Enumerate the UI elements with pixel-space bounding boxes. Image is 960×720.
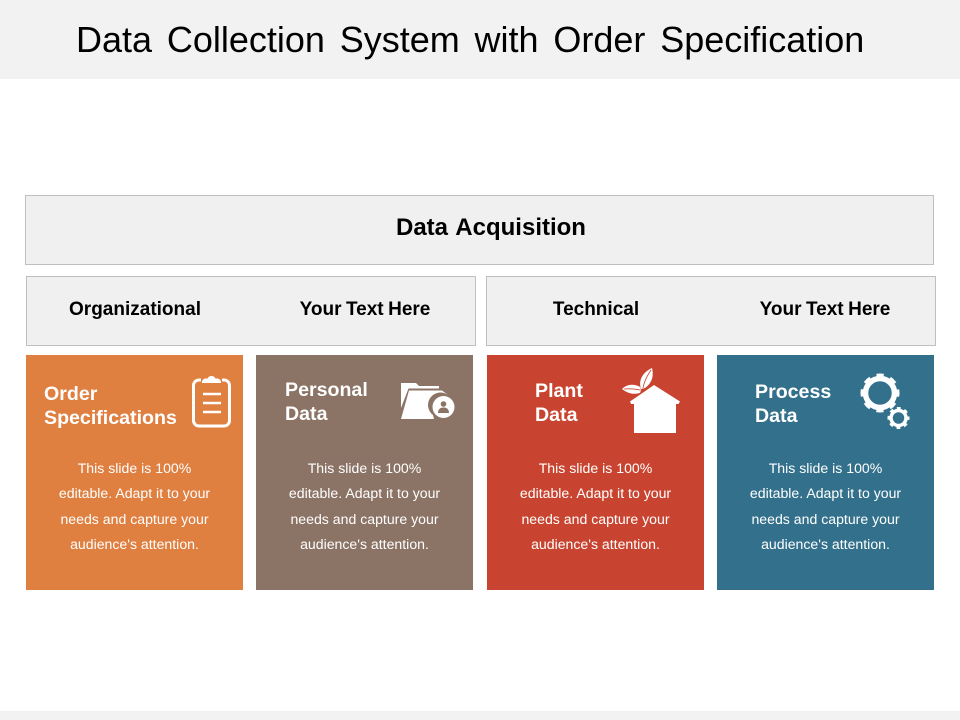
body text: process data [750,460,901,552]
heading: personal data: Personal [285,379,368,401]
heading: process data: Process [755,381,831,403]
body text: order specifications: needs and capture your [60,511,209,527]
title: Data Collection System with Order Specification [76,19,864,60]
footer strip [0,711,960,720]
heading: order specifications [44,383,177,429]
body text: process data: audience's attention. [761,536,890,552]
heading: plant data [535,380,583,426]
body text: order specifications [59,460,210,552]
label: organizational: Organizational [69,299,201,320]
heading: plant data: Plant [535,380,583,402]
body text: plant data [520,460,671,552]
heading: process data [755,381,831,427]
heading: plant data: Data [535,404,577,426]
icon: folder with person [401,383,454,419]
body text: personal data: This slide is 100% [308,460,421,476]
body text: order specifications: This slide is 100% [78,460,191,476]
body text: process data: editable. Adapt it to your [750,485,901,501]
panel: order specifications [26,355,243,590]
heading: personal data [285,379,368,425]
body text: process data: This slide is 100% [769,460,882,476]
icon: house with leaves [622,368,680,433]
label: your text here left: Your Text Here [300,299,430,320]
panel: process data [717,355,934,590]
body text: personal data: needs and capture your [290,511,439,527]
panel: organizational [26,276,476,346]
title bar [0,0,960,79]
body text: process data: needs and capture your [751,511,900,527]
heading: personal data: Data [285,403,327,425]
body text: order specifications: audience's attention. [70,536,199,552]
body text: plant data: This slide is 100% [539,460,652,476]
body text: plant data: audience's attention. [531,536,660,552]
heading: process data: Data [755,405,797,427]
body text: plant data: needs and capture your [521,511,670,527]
heading: order specifications: Order [44,383,97,405]
panel: technical [486,276,936,346]
heading: order specifications: Specifications [44,407,177,429]
icon: gears [860,374,910,429]
panel: plant data [487,355,704,590]
label: your text here right: Your Text Here [760,299,890,320]
panel: personal data [256,355,473,590]
body text: order specifications: editable. Adapt it to your [59,485,210,501]
heading: data acquisition: Data Acquisition [396,214,586,241]
body text: personal data: editable. Adapt it to your [289,485,440,501]
body text: personal data: audience's attention. [300,536,429,552]
body text: personal data [289,460,440,552]
label: technical: Technical [553,299,639,320]
panel: data acquisition [25,195,934,265]
body text: plant data: editable. Adapt it to your [520,485,671,501]
icon: clipboard [192,376,231,428]
